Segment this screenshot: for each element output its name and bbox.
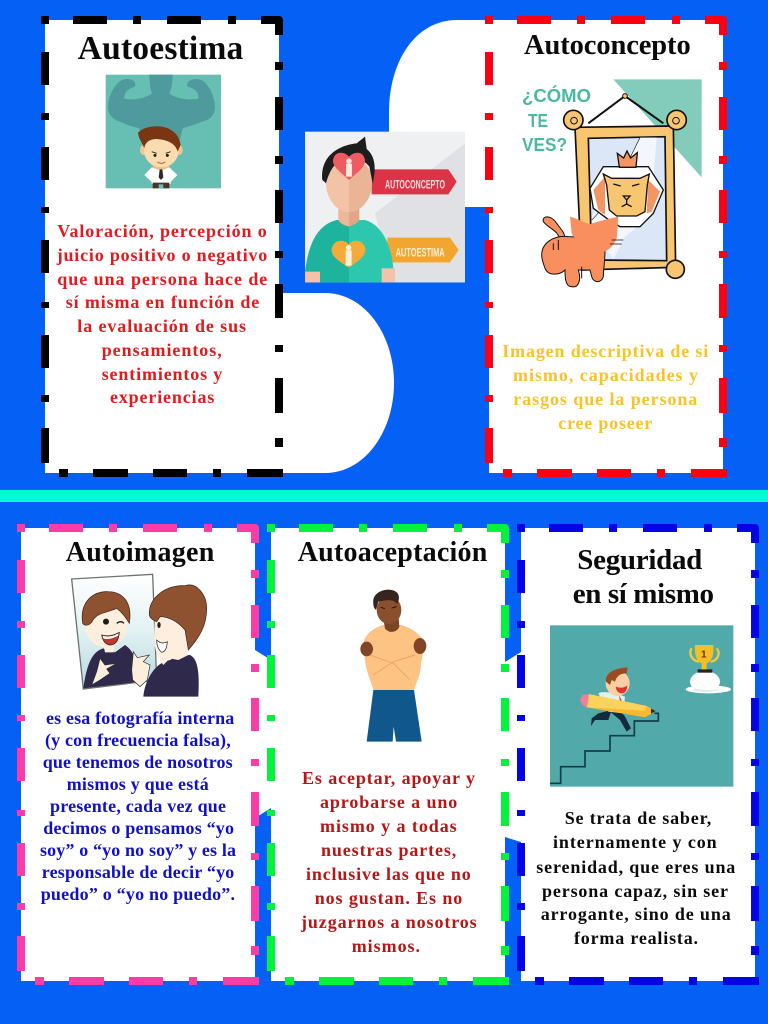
text: ¿Cómo te ves?: TE [528,110,548,131]
text: Autoestima definition: Valoración, percepción o [57,221,267,241]
text: Seguridad definition: internamente y con [553,832,717,852]
heading: Autoconcepto: Autoconcepto [524,30,691,61]
illustration: man with pencil climbing stairs to a trophy [550,625,733,787]
border: pink dashes [17,528,259,981]
text: Autoaceptación definition: nos gustan. Es no [315,888,462,908]
text: Autoconcepto definition: mismo, capacidades y [513,365,698,385]
text: Autoimagen definition: (y con frecuencia falsa), [45,730,231,751]
illustration: man hugging himself [360,590,426,742]
panel: Autoestima [41,20,283,473]
illustration: boy winking at his mirror reflection [72,574,207,697]
illustration: cat seeing a lion in the mirror [542,79,702,287]
text: Autoaceptación definition: aprobarse a uno [320,792,457,812]
border: red dashes [485,20,727,473]
text: Autoestima definition: sí misma en función de [66,292,259,312]
heading: Autoestima: Autoestima [78,30,244,67]
arrow: Autoestima [387,238,459,262]
heading: Autoimagen: Autoimagen [66,537,215,568]
panel: Seguridad en sí mismo [517,528,759,981]
border: green dashes [267,528,509,981]
text: Autoaceptación definition: Es aceptar, apoyar y [302,768,475,788]
panel: Autoimagen [17,528,259,981]
text: Autoaceptación definition: juzgarnos a nosotros [300,912,477,932]
text: Seguridad definition: arrogante, sino de una [541,904,731,924]
text: Autoestima definition: sentimientos y [102,364,222,384]
text: Autoimagen definition: decimos o pensamos “yo [43,818,234,838]
heading: Seguridad en sí mismo [573,544,714,610]
text: Autoestima definition: experiencias [110,387,214,407]
text: Autoconcepto definition [502,341,708,433]
panel: Autoconcepto [485,20,727,473]
text: Seguridad definition: serenidad, que eres una [536,857,735,877]
panel: Autoaceptación [267,528,509,981]
connector: white tab between Autoaceptación and Seguridad [500,652,521,842]
text: Autoimagen definition: mismos y que está [67,774,209,794]
divider band [0,490,768,502]
text: Autoaceptación definition: mismo y a todas [320,816,457,836]
arrow: Autoconcepto [372,169,457,194]
text: Autoconcepto definition: Imagen descriptiva de si [502,341,708,361]
text: Autoimagen definition [40,708,236,904]
arrow: Autoestima: AUTOESTIMA [396,246,445,260]
heading: Autoaceptación: Autoaceptación [298,537,488,568]
border: blue dashes [517,528,759,981]
heading: Seguridad en sí mismo: Seguridad [577,544,702,576]
text: Autoestima definition: pensamientos, [102,340,222,360]
connector: white tab between Autoimagen and Autoaceptación [250,648,271,818]
text: Seguridad definition: forma realista. [574,928,698,948]
text: Autoaceptación definition: mismos. [352,936,420,956]
text: Autoimagen definition: puedo” o “yo no puedo”. [41,884,235,904]
text: Autoimagen definition: es esa fotografía interna [46,708,234,728]
connector: white tab left of Autoconcepto [389,20,493,207]
central image: person with Autoconcepto and Autoestima arrows [305,132,465,282]
text: Autoaceptación definition: nuestras partes, [321,840,456,860]
illustration: man with pencil climbing stairs to a trophy: 1 [701,649,707,660]
text: Autoestima definition: la evaluación de sus [77,316,246,336]
connector: white tab right of Autoestima [275,293,394,473]
text: Autoestima definition: juicio positivo o negativo [56,245,267,265]
text: Seguridad definition [536,808,735,948]
text: Autoestima definition [56,221,267,407]
illustration: man with muscular shadow [106,75,221,188]
text: Autoimagen definition: que tenemos de nosotros [43,752,233,772]
heading: Seguridad en sí mismo: en sí mismo [573,578,714,610]
text: Seguridad definition: persona capaz, sin ser [542,881,728,901]
text: Autoimagen definition: presente, cada vez que [50,796,226,816]
text: Autoconcepto definition: cree poseer [558,413,652,433]
text: Seguridad definition: Se trata de saber, [565,808,711,828]
arrow: Autoconcepto: AUTOCONCEPTO [385,177,445,191]
text: ¿Cómo te ves?: ¿CÓMO [522,85,591,106]
border: black dashes [41,20,283,473]
text: Autoestima definition: que una persona hace de [57,269,267,289]
text: ¿Cómo te ves?: VES? [522,134,567,155]
text: Autoimagen definition: soy” o “yo no soy” y es la [40,840,236,860]
text: Autoconcepto definition: rasgos que la persona [513,389,697,409]
text: ¿Cómo te ves? [522,85,591,155]
text: Autoaceptación definition [300,768,477,956]
text: Autoaceptación definition: inclusive las que no [306,864,471,884]
text: Autoimagen definition: responsable de decir “yo [42,862,234,882]
